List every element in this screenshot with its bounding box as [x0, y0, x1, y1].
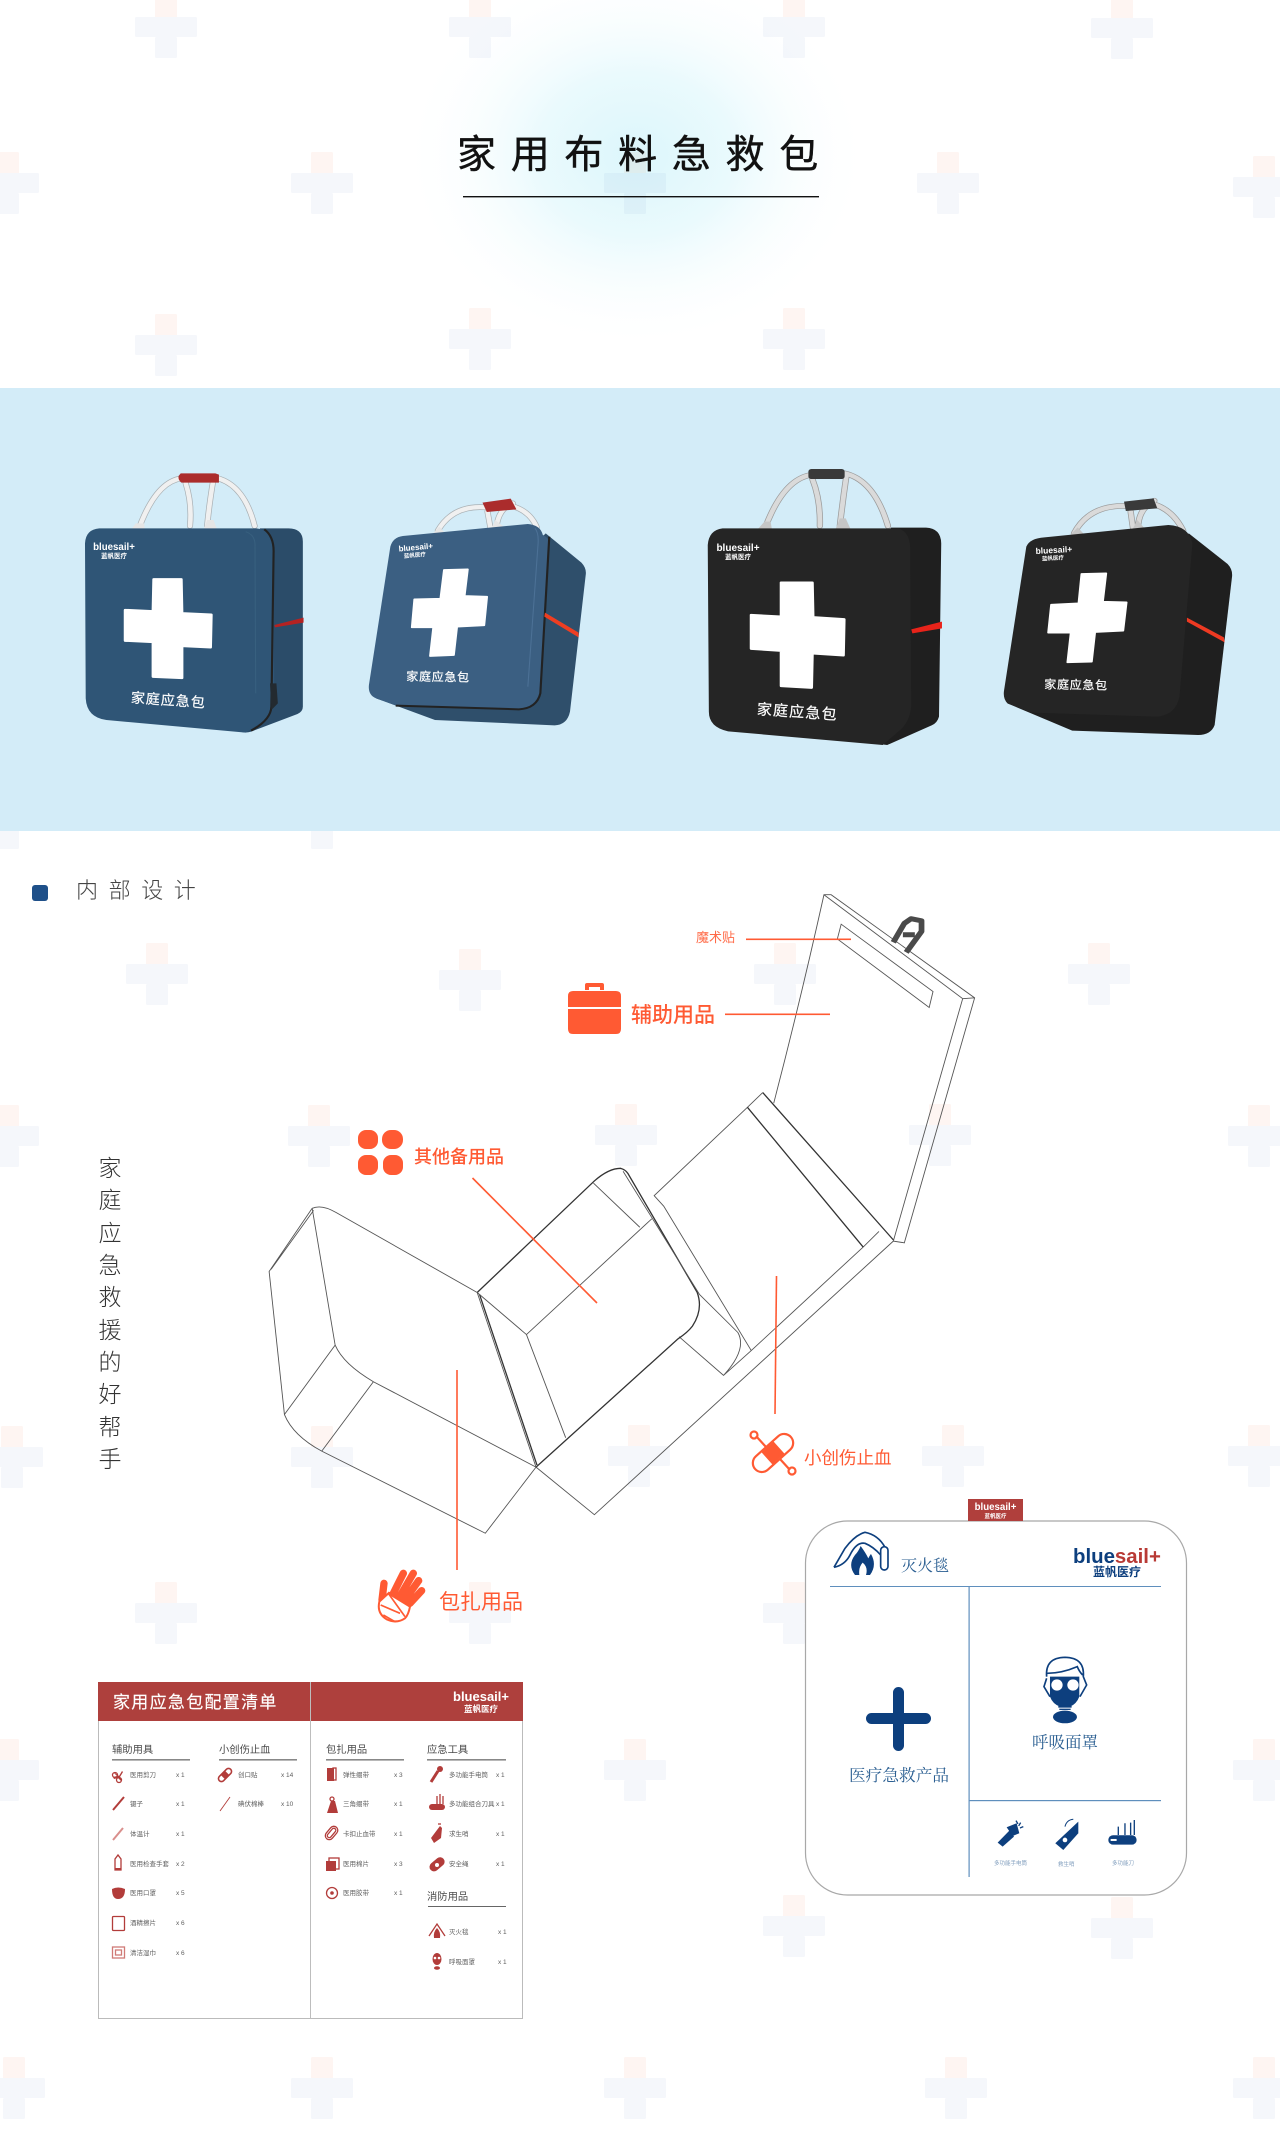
logo: bluesail+	[1073, 1546, 1161, 1568]
column: dressings: x 1	[394, 1801, 403, 1808]
column: auxiliary tools: x 5	[176, 1890, 185, 1897]
column: auxiliary tools: 医用剪刀	[130, 1770, 156, 1779]
vertical slogan: 的	[98, 1349, 122, 1375]
vertical slogan: 手	[98, 1446, 122, 1472]
product: black bag front view	[708, 469, 942, 745]
tool icons: 救生哨	[1058, 1860, 1075, 1868]
diagram: unfolded bag line drawing	[269, 895, 975, 1533]
lower pouch	[269, 1207, 536, 1533]
product: black bag angled view: 家庭应急包	[1044, 676, 1108, 693]
column: minor wounds: 小创伤止血	[219, 1743, 270, 1756]
vertical slogan: 家	[98, 1155, 122, 1181]
flap	[774, 895, 975, 1243]
logo	[1073, 1546, 1161, 1579]
product: black bag angled view	[1004, 498, 1232, 735]
panel: package label card	[806, 1499, 1186, 1895]
column: dressings: x 3	[394, 1861, 403, 1868]
column: minor wounds: 创口贴	[238, 1770, 258, 1779]
column: auxiliary tools: x 1	[176, 1831, 185, 1838]
column: auxiliary tools: x 6	[176, 1950, 185, 1957]
product: black bag front view: 家庭应急包	[756, 700, 838, 724]
icon: flap loop	[893, 919, 922, 952]
column: auxiliary tools: 医用检查手套	[130, 1859, 170, 1868]
vertical slogan: 好	[98, 1381, 122, 1407]
vertical slogan: 援	[98, 1317, 122, 1343]
checklist header: bluesail+	[453, 1689, 509, 1704]
column: emergency tools: 多功能组合刀具	[449, 1799, 495, 1808]
callout: auxiliary supplies: 辅助用品	[631, 1004, 715, 1027]
column: fire supplies: 呼吸面罩	[449, 1957, 476, 1966]
column: emergency tools: 应急工具	[427, 1743, 468, 1756]
vertical slogan: 帮	[98, 1414, 122, 1440]
column: emergency tools: x 1	[496, 1801, 505, 1808]
inner pouch	[477, 1168, 699, 1467]
icon: four blobs	[358, 1130, 403, 1175]
vertical slogan: 急	[98, 1252, 122, 1278]
column: emergency tools: x 1	[496, 1772, 505, 1779]
column: auxiliary tools: x 1	[176, 1772, 185, 1779]
column: dressings: x 1	[394, 1831, 403, 1838]
vertical slogan: 应	[98, 1220, 122, 1246]
column: fire supplies: 灭火毯	[449, 1927, 469, 1936]
medical products	[849, 1687, 949, 1785]
product: blue bag front view: 蓝帆医疗	[101, 551, 128, 560]
panel: checklist	[98, 1682, 523, 2019]
column: minor wounds: 碘伏棉棒	[238, 1799, 264, 1808]
logo: 蓝帆医疗	[1093, 1564, 1141, 1579]
column: dressings: 医用棉片	[343, 1859, 369, 1868]
column: emergency tools: 求生哨	[449, 1829, 469, 1838]
product: black bag front view: 蓝帆医疗	[725, 552, 752, 561]
product: black bag angled view: bluesail+	[1035, 544, 1072, 556]
column: fire supplies	[427, 1890, 507, 1970]
title: 家用布料急救包	[457, 134, 833, 177]
column: dressings: 弹性绷带	[343, 1770, 370, 1779]
column: fire supplies: 消防用品	[427, 1890, 468, 1903]
column: emergency tools: x 1	[496, 1831, 505, 1838]
column: emergency tools: 安全绳	[449, 1859, 469, 1868]
panel: product band	[0, 388, 1280, 831]
column: auxiliary tools: 清洁湿巾	[130, 1948, 156, 1957]
panel: package label card: 灭火毯	[901, 1556, 949, 1575]
checklist header: 家用应急包配置清单	[113, 1693, 278, 1712]
respirator	[1032, 1657, 1098, 1752]
respirator: 呼吸面罩	[1032, 1733, 1098, 1752]
product: black bag angled view: 蓝帆医疗	[1042, 553, 1065, 563]
callout: wound care: 小创伤止血	[804, 1448, 892, 1468]
product: black bag front view: bluesail+	[716, 543, 760, 554]
middle compartment	[536, 1093, 893, 1515]
vertical slogan: 庭	[98, 1187, 122, 1213]
icon: briefcase	[568, 983, 621, 1034]
column: emergency tools	[427, 1743, 506, 1873]
column: emergency tools: 多功能手电筒	[449, 1770, 488, 1779]
product: blue bag front view: 家庭应急包	[130, 689, 206, 711]
icon: bandaged hand	[379, 1573, 422, 1622]
tool icons: 多功能手电筒	[994, 1859, 1028, 1867]
vertical slogan	[98, 1155, 122, 1472]
column: auxiliary tools: x 6	[176, 1920, 185, 1927]
product: blue bag angled view: bluesail+	[398, 541, 434, 553]
icon: fire blanket	[834, 1532, 888, 1575]
column: auxiliary tools: 医用口罩	[130, 1889, 156, 1897]
product: blue bag angled view	[369, 499, 586, 725]
column: dressings: x 3	[394, 1772, 403, 1779]
column: auxiliary tools: x 1	[176, 1801, 185, 1808]
callout: dressing supplies: 包扎用品	[439, 1591, 523, 1614]
callout: other supplies: 其他备用品	[414, 1147, 504, 1167]
product: blue bag front view: bluesail+	[93, 542, 135, 553]
column: fire supplies: x 1	[498, 1959, 507, 1966]
callout: other supplies	[358, 1130, 597, 1303]
column: dressings: 包扎用品	[326, 1743, 367, 1756]
column: dressings: 医用胶带	[343, 1888, 370, 1897]
icon: bandage	[749, 1430, 797, 1476]
tool icons: 多功能刀	[1112, 1859, 1134, 1867]
callout: wound care	[749, 1276, 892, 1476]
column: auxiliary tools: 酒精擦片	[130, 1918, 156, 1927]
callout: auxiliary supplies	[568, 983, 830, 1034]
product: blue bag front view	[85, 473, 304, 733]
column: dressings: 卡扣止血带	[343, 1829, 376, 1838]
column: emergency tools: x 1	[496, 1861, 505, 1868]
column: auxiliary tools: 辅助用具	[112, 1743, 153, 1756]
column: auxiliary tools	[112, 1743, 190, 1958]
column: auxiliary tools: 体温计	[130, 1829, 150, 1838]
callout: dressing supplies	[379, 1370, 523, 1622]
column: fire supplies: x 1	[498, 1929, 507, 1936]
column: minor wounds	[217, 1743, 297, 1811]
tool icons	[994, 1819, 1137, 1868]
column: dressings: 三角绷带	[343, 1799, 370, 1808]
background glow	[401, 0, 871, 350]
checklist header: 蓝帆医疗	[464, 1704, 498, 1714]
column: dressings	[324, 1743, 404, 1898]
column: auxiliary tools: x 2	[176, 1861, 185, 1868]
red logo tag: 蓝帆医疗	[984, 1512, 1007, 1520]
column: auxiliary tools: 镊子	[130, 1799, 144, 1808]
medical products: 医疗急救产品	[849, 1766, 949, 1785]
red logo tag	[968, 1499, 1023, 1521]
column: minor wounds: x 10	[281, 1801, 294, 1808]
product: blue bag angled view: 蓝帆医疗	[404, 550, 427, 560]
column: dressings: x 1	[394, 1890, 403, 1897]
product: blue bag angled view: 家庭应急包	[406, 668, 470, 685]
section heading: interior design: 内部设计	[76, 878, 206, 903]
vertical slogan: 救	[98, 1284, 122, 1310]
callout: velcro: 魔术贴	[696, 930, 735, 945]
column: minor wounds: x 14	[281, 1772, 294, 1779]
red logo tag: bluesail+	[975, 1502, 1017, 1513]
checklist header	[98, 1682, 523, 1721]
